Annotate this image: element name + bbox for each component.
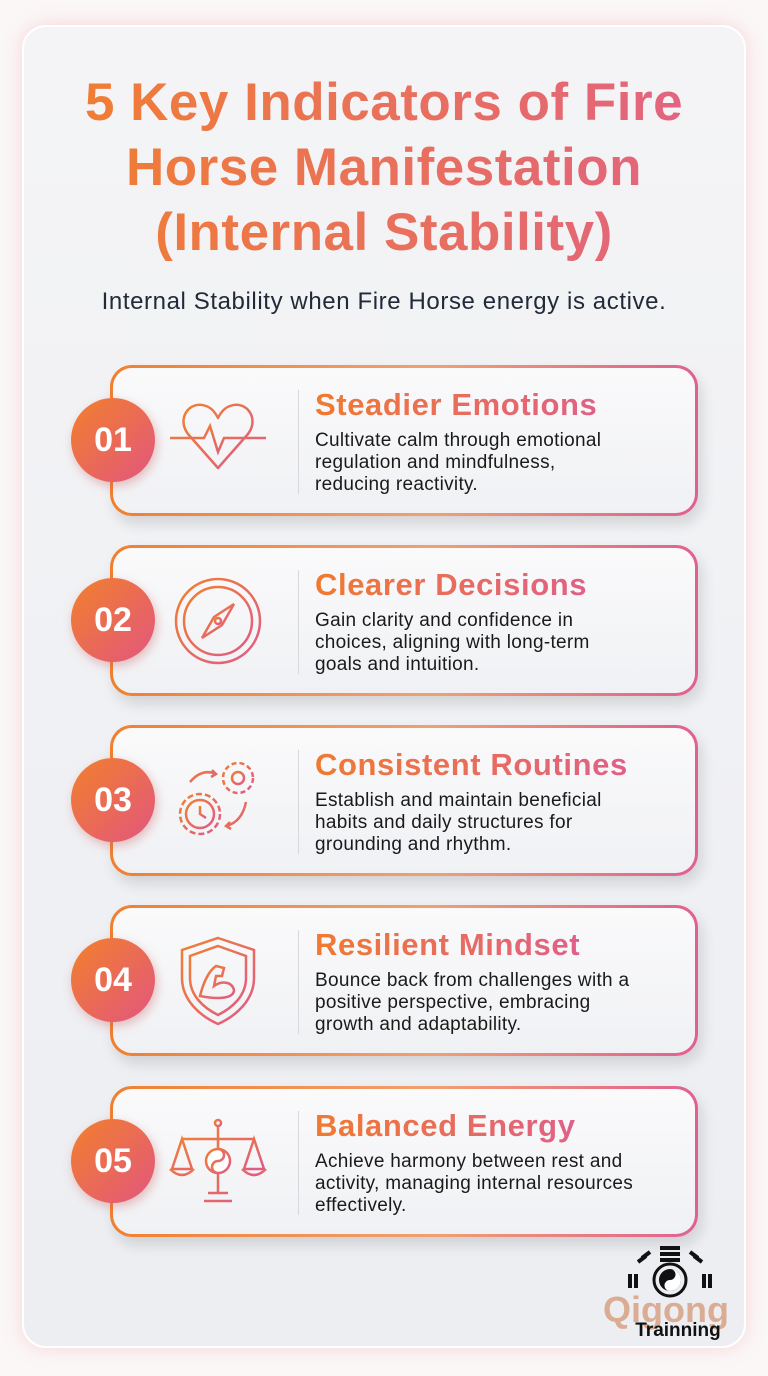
icon: compass [174,578,262,664]
text: reducing reactivity. [315,474,478,495]
badge 05 [71,1119,155,1203]
text: Cultivate calm through emotional [315,430,601,451]
text: regulation and mindfulness, [315,452,555,473]
badge 04: 04 [94,960,132,998]
card 4: resilient mindset [110,905,698,1056]
badge 02 [71,578,155,662]
icon: shield with arm [180,936,256,1026]
heading: Consistent Routines [315,747,628,782]
text: positive perspective, embracing [315,992,590,1013]
heading: Resilient Mindset [315,927,580,962]
heading: Balanced Energy [315,1108,576,1143]
text: Achieve harmony between rest and [315,1151,622,1172]
badge 01: 01 [94,420,132,458]
text: habits and daily structures for [315,812,572,833]
card 1: steadier emotions [110,365,698,516]
badge 02: 02 [94,600,132,638]
text: effectively. [315,1195,407,1216]
text: growth and adaptability. [315,1014,521,1035]
badge 01 [71,398,155,482]
text: choices, aligning with long-term [315,632,590,653]
text [315,430,601,495]
card 2: clearer decisions [110,545,698,696]
title: Horse Manifestation [126,138,642,197]
subtitle: Internal Stability when Fire Horse energy is active. [102,288,666,315]
icon: scales with yin yang [169,1118,267,1202]
heading: Clearer Decisions [315,567,587,602]
text [315,970,630,1035]
text: goals and intuition. [315,654,479,675]
badge 03: 03 [94,780,132,818]
heading: Steadier Emotions [315,387,597,422]
text: Bounce back from challenges with a [315,970,629,991]
title: 5 Key Indicators of Fire [85,73,683,132]
text: activity, managing internal resources [315,1173,633,1194]
text [315,610,590,675]
card 5: balanced energy [110,1086,698,1237]
badge 03 [71,758,155,842]
icon: gears and clock [178,762,254,836]
text: Establish and maintain beneficial [315,790,602,811]
icon: heart pulse [170,404,266,470]
title [0,70,768,265]
badge 05: 05 [94,1142,132,1180]
text [315,1151,633,1216]
logo: Qigong Training: Trainning [635,1320,721,1341]
title: (Internal Stability) [155,203,613,262]
text [315,790,602,855]
badge 04 [71,938,155,1022]
logo: Qigong Training: Qigong [603,1289,729,1330]
text: Gain clarity and confidence in [315,610,573,631]
logo: Qigong Training [603,1246,729,1341]
text: grounding and rhythm. [315,834,511,855]
card 3: consistent routines [110,725,698,876]
